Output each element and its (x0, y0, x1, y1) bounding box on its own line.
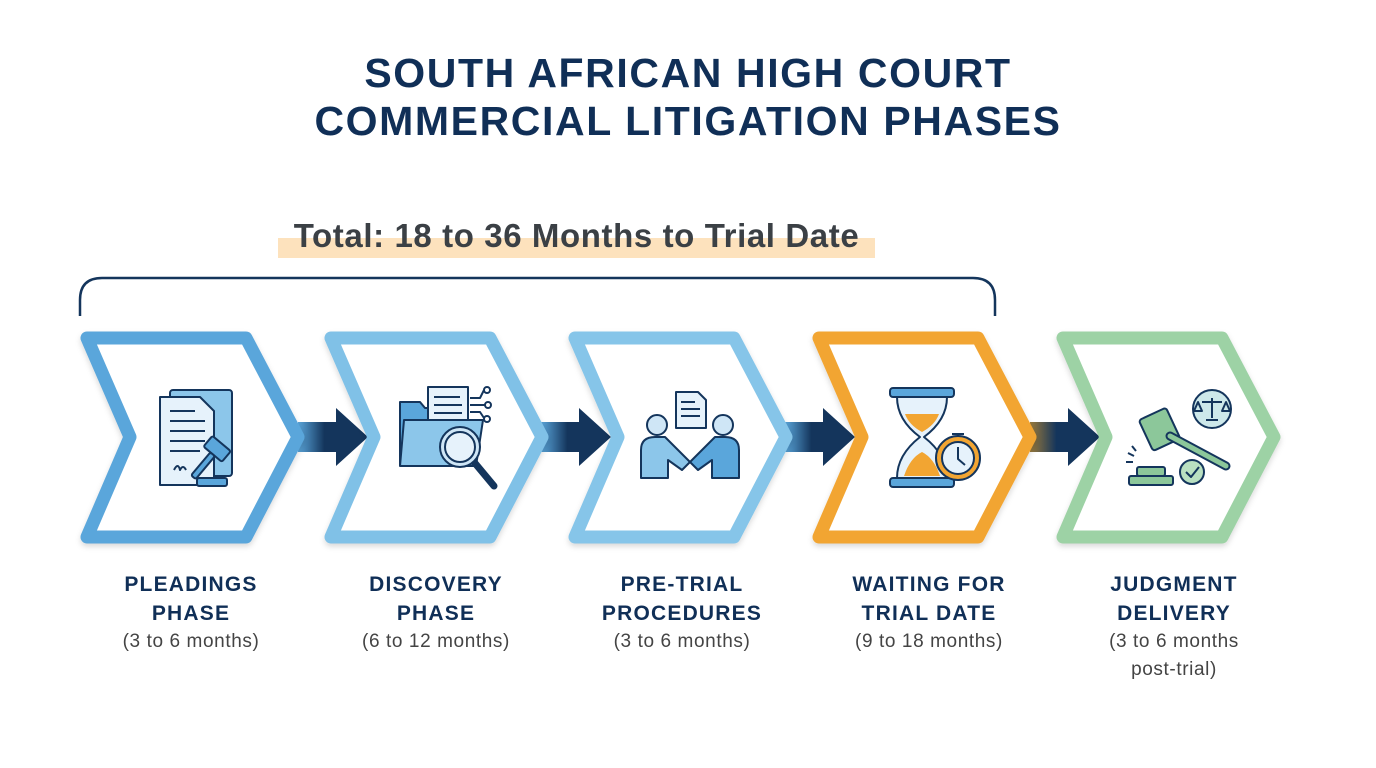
label: pre-trial: (3 to 6 months) (614, 631, 750, 652)
label: pre-trial: PRE-TRIAL (621, 573, 743, 596)
arrow 3 (785, 408, 855, 466)
label: pleadings (123, 573, 259, 652)
label: pleadings: (3 to 6 months) (123, 631, 259, 652)
icon: handshake (641, 392, 739, 478)
arrow 2 (541, 408, 611, 466)
title: COMMERCIAL LITIGATION PHASES (314, 98, 1062, 144)
label: waiting (852, 573, 1006, 652)
label: judgment: post-trial) (1131, 659, 1217, 680)
label: judgment (1109, 573, 1239, 680)
chevron 1: pleadings (87, 338, 298, 537)
label: judgment: DELIVERY (1117, 602, 1231, 625)
label: discovery (362, 573, 510, 652)
total duration callout: Total: 18 to 36 Months to Trial Date (294, 217, 859, 254)
label: waiting: (9 to 18 months) (855, 631, 1003, 652)
arrow 4 (1030, 408, 1100, 466)
label: discovery: (6 to 12 months) (362, 631, 510, 652)
label: discovery: DISCOVERY (369, 573, 503, 596)
label: waiting: TRIAL DATE (862, 602, 996, 625)
icon: gavel with scales (1126, 390, 1231, 485)
label: pre-trial: PROCEDURES (602, 602, 762, 625)
label: judgment: JUDGMENT (1110, 573, 1238, 596)
chevron 2: discovery (331, 338, 542, 537)
label: waiting: WAITING FOR (852, 573, 1006, 596)
bracket (80, 278, 995, 316)
label: discovery: PHASE (397, 602, 475, 625)
label: pleadings: PLEADINGS (124, 573, 258, 596)
chevron 4: waiting (819, 338, 1030, 537)
label: judgment: (3 to 6 months (1109, 631, 1239, 652)
icon: folder with magnifier (400, 387, 494, 486)
label: pre-trial (602, 573, 762, 652)
title: SOUTH AFRICAN HIGH COURT (364, 50, 1012, 96)
label: pleadings: PHASE (152, 602, 230, 625)
title (314, 50, 1062, 144)
chevron 5: judgment (1063, 338, 1274, 537)
chevron 3: pre-trial (575, 338, 786, 537)
arrow 1 (298, 408, 368, 466)
icon: documents with gavel (160, 390, 232, 486)
icon: hourglass with clock (890, 388, 980, 487)
